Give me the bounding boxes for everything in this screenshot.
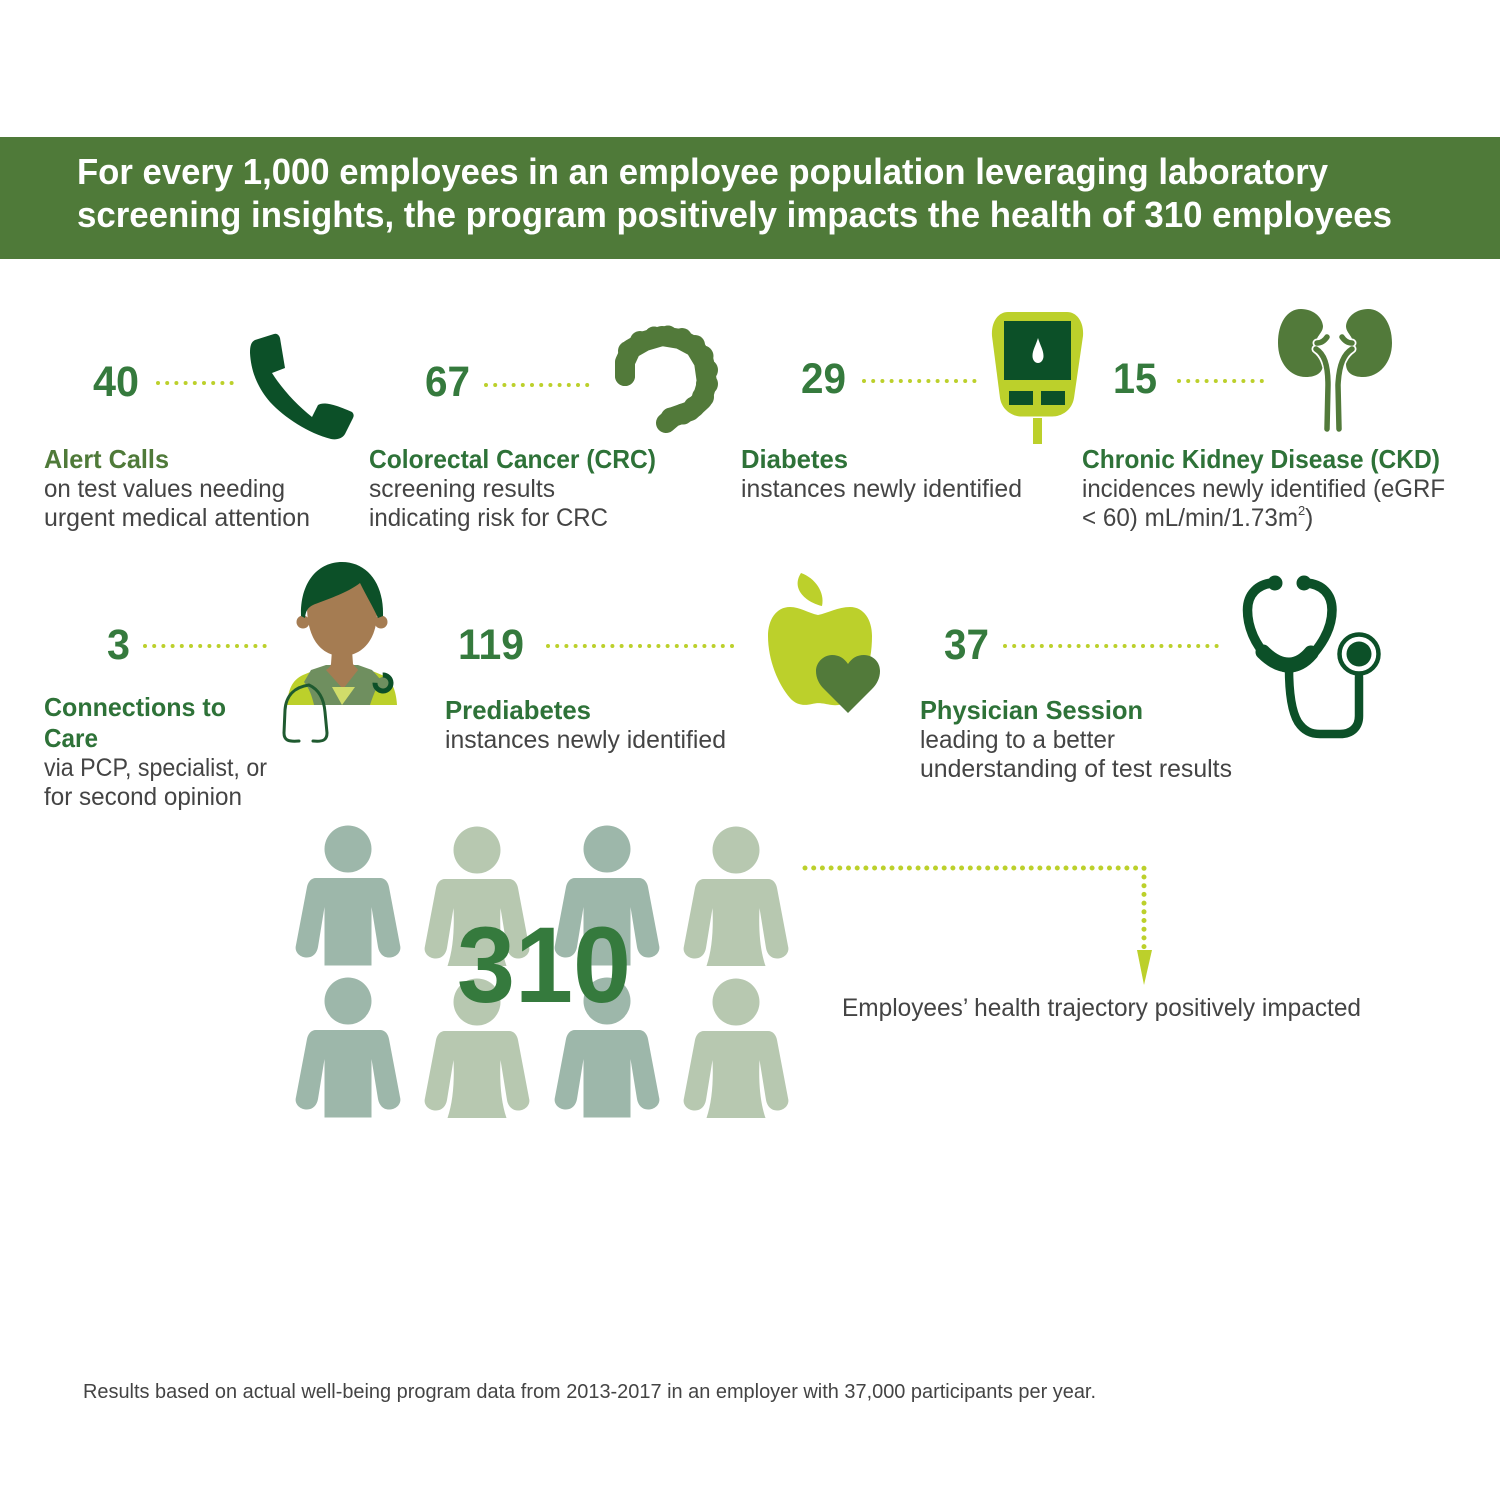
text: prediabetes: Prediabetes <box>445 695 591 725</box>
icon: apple with heart <box>768 573 880 713</box>
text: alert calls: Alert Calls <box>44 444 169 474</box>
text: physician session: understanding of test results <box>920 755 1232 783</box>
text: physician session: Physician Session <box>920 695 1143 725</box>
number: 15: 15 <box>1113 355 1157 403</box>
text: prediabetes <box>445 695 726 754</box>
text: chronic kidney disease: Chronic Kidney Disease (CKD) <box>1082 444 1440 474</box>
text: physician session: leading to a better <box>920 726 1115 754</box>
text: alert calls: urgent medical attention <box>44 504 310 532</box>
callout: employees impacted: Employees’ health trajectory positively impacted <box>842 994 1361 1022</box>
title <box>77 151 1392 235</box>
text: connections to care: for second opinion <box>44 783 242 811</box>
text: alert calls: on test values needing <box>44 475 285 503</box>
panel: diabetes <box>741 312 1083 503</box>
text: chronic kidney disease: ) <box>1305 504 1313 532</box>
number: 29: 29 <box>801 355 846 403</box>
panel: prediabetes <box>445 573 880 754</box>
title: screening insights, the program positively impacts the health of 310 employees <box>77 194 1392 235</box>
icon: doctor <box>284 562 397 741</box>
icon: kidneys <box>1278 309 1392 429</box>
text: chronic kidney disease: incidences newly identified (eGRF <box>1082 475 1445 503</box>
text: diabetes: Diabetes <box>741 444 848 474</box>
text: colorectal cancer: Colorectal Cancer (CRC) <box>369 444 656 474</box>
text: diabetes <box>741 444 1022 503</box>
panel: colorectal cancer <box>369 326 718 532</box>
icon: glucose meter <box>992 312 1083 444</box>
panel: chronic kidney disease <box>1082 309 1445 532</box>
text: physician session <box>920 695 1232 783</box>
number: 37: 37 <box>944 621 989 669</box>
text: colorectal cancer: indicating risk for CRC <box>369 504 608 532</box>
panel: alert calls <box>44 334 354 532</box>
text: connections to care: via PCP, specialist, or <box>44 754 267 782</box>
text: connections to care: Care <box>44 723 98 753</box>
icon: telephone <box>250 334 354 439</box>
header banner <box>0 137 1500 259</box>
number: 119: 119 <box>458 621 524 669</box>
panel: connections to care <box>44 562 397 811</box>
icon: stethoscope <box>1248 576 1378 734</box>
footnote: Results based on actual well-being program data from 2013-2017 in an employer with 37,000 participants per year. <box>83 1381 1096 1403</box>
text: chronic kidney disease <box>1082 444 1445 532</box>
icon: colon <box>615 326 718 432</box>
text: colorectal cancer <box>369 444 656 532</box>
number: 3: 3 <box>107 621 130 669</box>
text: diabetes: instances newly identified <box>741 475 1022 503</box>
number: 67: 67 <box>425 358 470 406</box>
text: connections to care <box>44 692 267 811</box>
text: colorectal cancer: screening results <box>369 475 555 503</box>
text: chronic kidney disease: 2 <box>1298 503 1305 518</box>
people pictogram <box>296 826 788 1118</box>
total: 310: 310 <box>457 904 631 1025</box>
title: For every 1,000 employees in an employee population leveraging laboratory <box>77 151 1328 192</box>
panel: physician session <box>920 576 1378 783</box>
text: connections to care: Connections to <box>44 692 226 722</box>
arrow: dotted connector <box>805 868 1152 985</box>
text: chronic kidney disease: < 60) mL/min/1.73m <box>1082 504 1298 532</box>
text: prediabetes: instances newly identified <box>445 726 726 754</box>
number: 40: 40 <box>93 358 139 406</box>
text: alert calls <box>44 444 310 532</box>
